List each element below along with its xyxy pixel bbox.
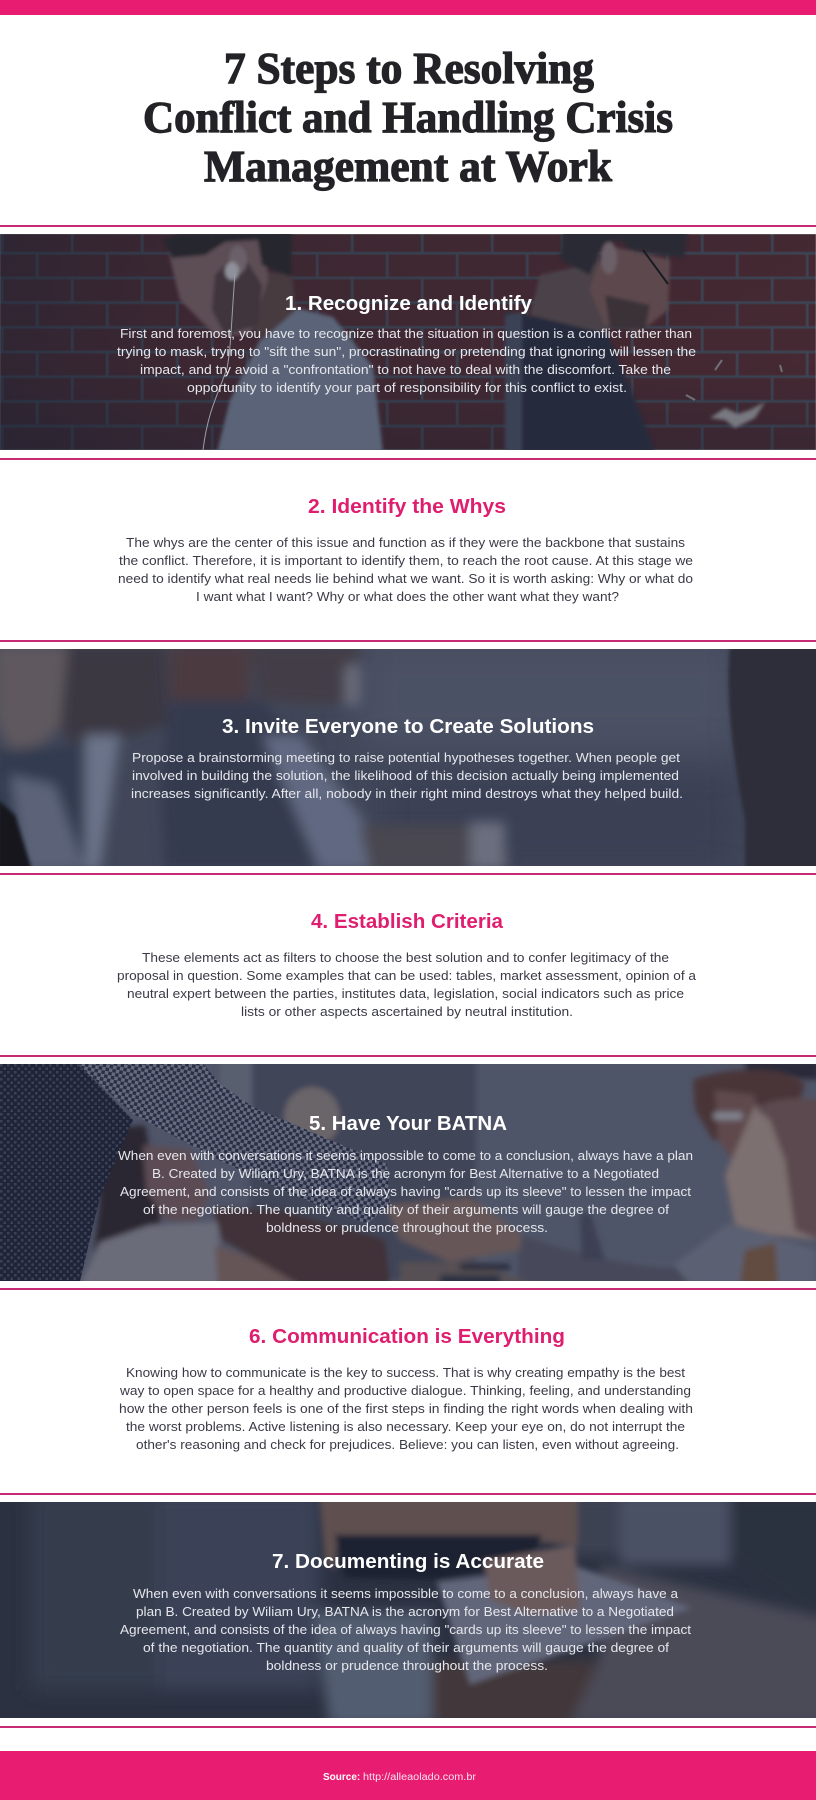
jacket — [0, 1060, 133, 1281]
panel: step 4 establish criteria — [117, 911, 697, 1019]
text block: B. Created by Wiliam Ury, BATNA is the acronym for Best Alternative to a Negotiated — [152, 1166, 659, 1181]
text block: When even with conversations it seems impossible to come to a conclusion, always have a plan — [118, 1148, 693, 1163]
text block: Propose a brainstorming meeting to raise potential hypotheses together. When people get — [132, 750, 680, 765]
panel: step 2 identify the whys — [118, 496, 693, 604]
text block: plan B. Created by Wiliam Ury, BATNA is the acronym for Best Alternative to a Negotiated — [136, 1604, 674, 1619]
heading: 2. Identify the Whys — [308, 496, 506, 518]
text block: I want what I want? Why or what does the other want what they want? — [196, 589, 619, 604]
heading: 7. Documenting is Accurate — [272, 1551, 544, 1573]
text block: way to open space for a healthy and productive dialogue. Thinking, feeling, and understanding — [119, 1383, 691, 1398]
laptop — [580, 1212, 605, 1260]
text block: Agreement, and consists of the idea of always having "cards up its sleeve" to lessen the impact — [120, 1184, 691, 1199]
clasped hands — [385, 1197, 522, 1262]
woman with glasses — [693, 1069, 805, 1142]
text block — [119, 1365, 693, 1452]
text block: impact, and try avoid a "confrontation" to not have to deal with the discomfort. Take the — [140, 362, 671, 377]
panel: step 6 communication is everything — [119, 1326, 693, 1452]
text block: boldness or prudence throughout the process. — [266, 1658, 548, 1673]
footer: source — [0, 1751, 816, 1800]
text block: opportunity to identify your part of responsibility for this conflict to exist. — [187, 380, 627, 395]
text block — [120, 1586, 691, 1673]
title — [143, 44, 673, 191]
text block: When even with conversations it seems impossible to come to a conclusion, always have a — [133, 1586, 679, 1601]
text block: Agreement, and consists of the idea of always having "cards up its sleeve" to lessen the impact — [120, 1622, 691, 1637]
text block — [117, 326, 696, 395]
text block: other's reasoning and check for prejudices. Believe: you can listen, even without agreeing. — [136, 1437, 679, 1452]
text block: proposal in question. Some examples that can be used: tables, market assessment, opinion of a — [117, 968, 697, 983]
title: 7 Steps to Resolving — [224, 44, 594, 93]
text block: need to identify what real needs lie behind what we want. So it is worth asking: Why or what do — [118, 571, 693, 586]
text block — [118, 535, 693, 604]
text block — [118, 1148, 693, 1235]
heading: 5. Have Your BATNA — [309, 1113, 507, 1135]
top accent bar — [0, 0, 816, 15]
title: Conflict and Handling Crisis — [143, 93, 673, 142]
text block: Knowing how to communicate is the key to success. That is why creating empathy is the best — [126, 1365, 685, 1380]
source credit: http://alleaolado.com.br — [363, 1772, 477, 1783]
text block: the worst problems. Active listening is also necessary. Keep your eye on, do not interrupt the — [126, 1419, 685, 1434]
panel: step 5 have your BATNA — [0, 1060, 816, 1285]
text block: First and foremost, you have to recognize that the situation in question is a conflict rather than — [120, 326, 692, 341]
photo: team around a table, blurred — [0, 640, 816, 870]
heading: 4. Establish Criteria — [311, 911, 504, 933]
table — [399, 1260, 522, 1281]
text block: These elements act as filters to choose the best solution and to confer legitimacy of the — [142, 950, 669, 965]
panel: step 7 documenting is accurate — [0, 1490, 816, 1725]
heading: 3. Invite Everyone to Create Solutions — [222, 716, 594, 738]
photo: two men back to back against a brick wall — [0, 232, 816, 452]
photo: business handshake — [0, 1060, 816, 1285]
text block — [131, 750, 683, 801]
heading: 6. Communication is Everything — [249, 1326, 565, 1348]
photo: hands signing a document, blurred — [0, 1490, 816, 1725]
text block: the conflict. Therefore, it is important to identify them, to reach the root cause. At this stage we — [119, 553, 693, 568]
panel: step 3 invite everyone to create solutions — [0, 640, 816, 870]
right man — [505, 312, 655, 452]
hand on shoulder — [740, 1243, 778, 1285]
text block: of the negotiation. The quantity and quality of their arguments will gauge the degree of — [143, 1640, 669, 1655]
source credit: Source: — [323, 1772, 360, 1783]
left man — [217, 307, 383, 452]
seated woman at left — [91, 1122, 163, 1252]
text block: of the negotiation. The quantity and quality of their arguments will gauge the degree of — [143, 1202, 669, 1217]
outstretched arm — [676, 1225, 815, 1281]
text block: boldness or prudence throughout the process. — [266, 1220, 548, 1235]
paint marks on bricks — [710, 402, 765, 428]
brown-haired person behind handshake — [213, 1208, 390, 1285]
text block: involved in building the solution, the likelihood of this decision actually being implemented — [132, 768, 679, 783]
text block: lists or other aspects ascertained by neutral institution. — [241, 1004, 573, 1019]
text block: trying to mask, trying to "sift the sun", procrastinating or pretending that ignoring will lessen the — [117, 344, 696, 359]
title: Management at Work — [204, 142, 613, 191]
panel: step 1 recognize and identify — [0, 232, 816, 452]
text block — [117, 950, 697, 1019]
woman in front — [725, 1105, 816, 1240]
text block: The whys are the center of this issue and function as if they were the backbone that sustains — [126, 535, 686, 550]
text block: how the other person feels is one of the first steps in finding the right words when dealing with — [119, 1401, 693, 1416]
text block: increases significantly. After all, nobody in their right mind destroys what they helped build. — [131, 786, 683, 801]
text block: neutral expert between the parties, institutes data, legislation, social indicators such as price — [127, 986, 684, 1001]
heading: 1. Recognize and Identify — [285, 293, 533, 315]
sleeve — [73, 1060, 390, 1224]
